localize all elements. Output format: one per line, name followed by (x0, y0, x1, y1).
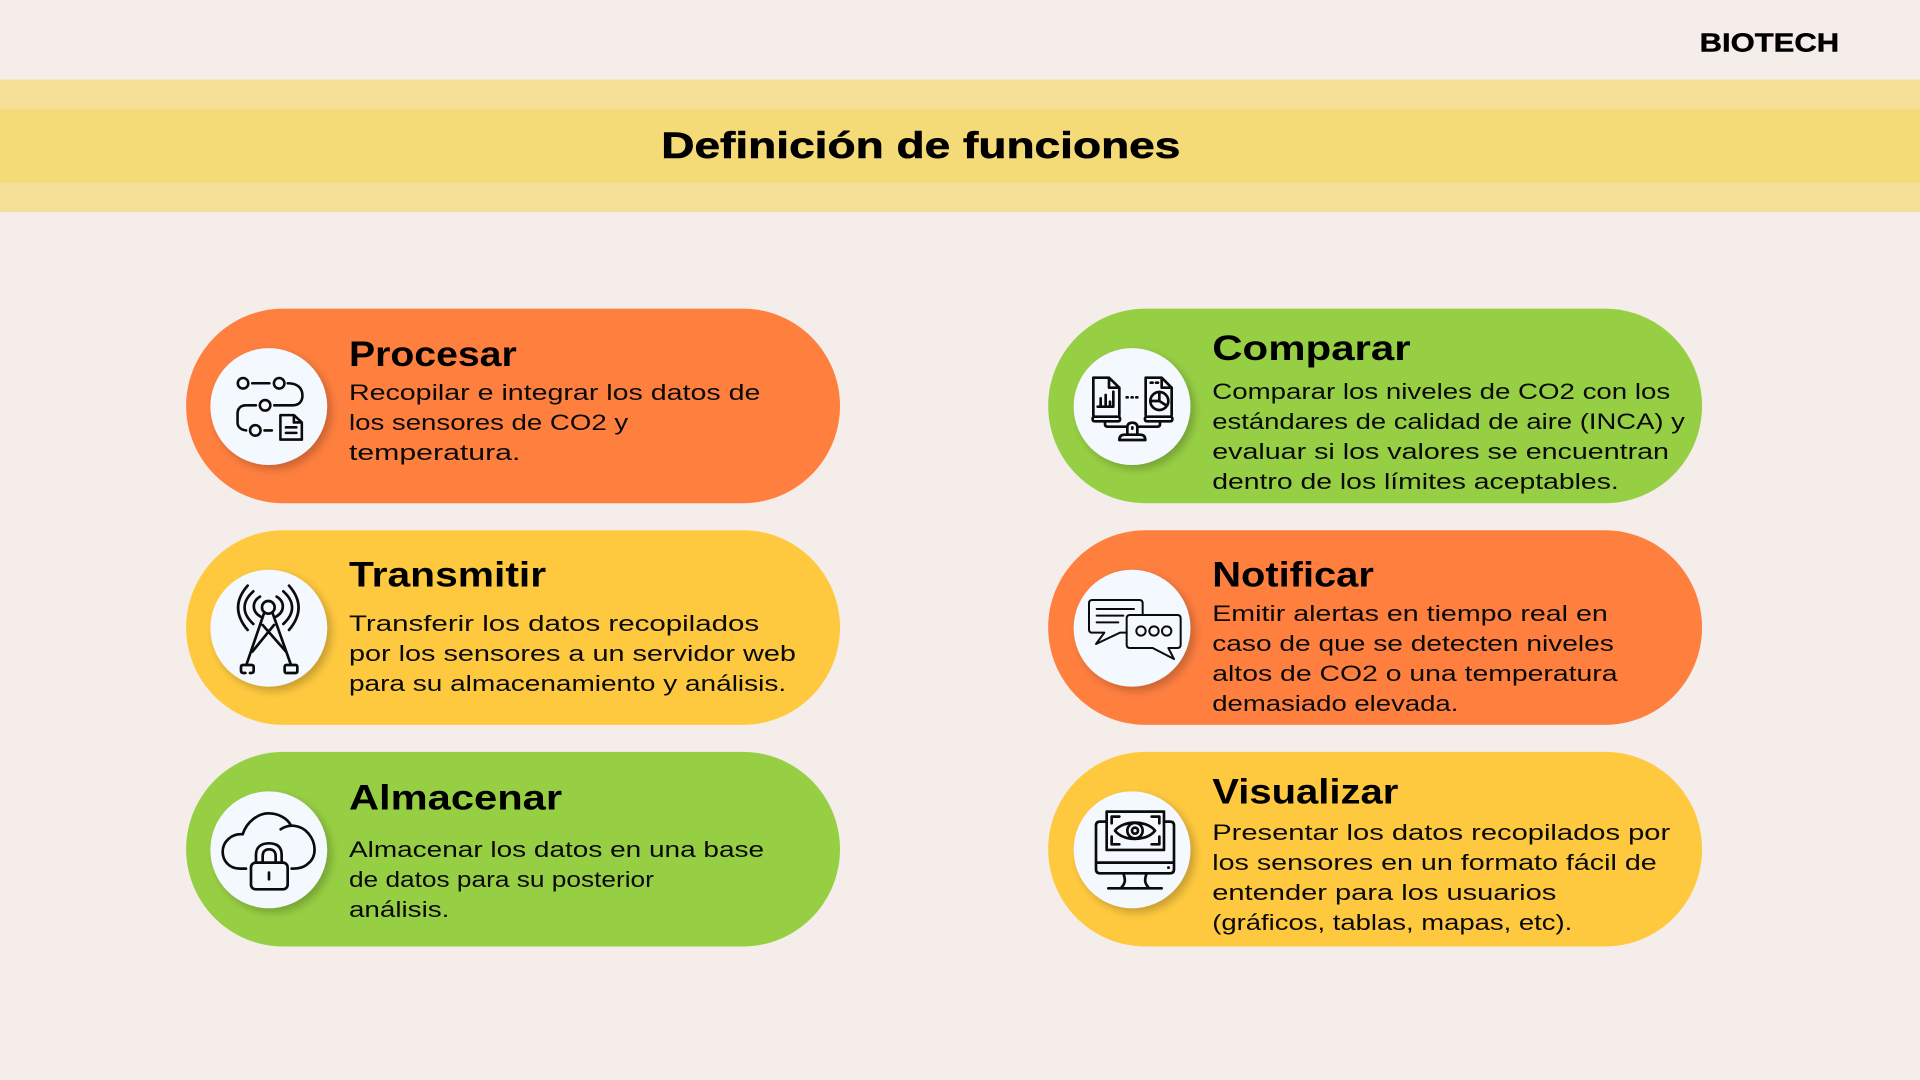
description (1212, 601, 1619, 716)
description: altos de CO2 o una temperatura (1212, 661, 1619, 686)
description: (gráficos, tablas, mapas, etc). (1212, 910, 1572, 935)
description (1212, 379, 1685, 494)
description: Presentar los datos recopilados por (1212, 820, 1670, 845)
description: Emitir alertas en tiempo real en (1212, 601, 1608, 626)
icon: chat bubbles (1089, 600, 1181, 659)
icon: monitor with eye (1096, 812, 1174, 888)
heading: Visualizar (1212, 772, 1399, 811)
icon: process flow with document (238, 378, 302, 440)
description: estándares de calidad de aire (INCA) y (1212, 409, 1685, 434)
description: de datos para su posterior (349, 867, 654, 892)
description: por los sensores a un servidor web (349, 641, 796, 666)
description: temperatura. (349, 440, 520, 465)
icon: antenna tower (238, 586, 298, 673)
panel: Notificar (1048, 530, 1702, 725)
description: evaluar si los valores se encuentran (1212, 439, 1669, 464)
description: los sensores en un formato fácil de (1212, 850, 1657, 875)
title: Definición de funciones (661, 125, 1180, 166)
description: caso de que se detecten niveles (1212, 631, 1614, 656)
heading: Comparar (1212, 329, 1411, 368)
panel: Procesar (186, 309, 840, 503)
panel: Comparar (1048, 309, 1702, 503)
description: los sensores de CO2 y (349, 410, 628, 435)
icon: documents on a balance (1093, 378, 1172, 440)
description (1212, 820, 1670, 935)
panel: Almacenar (186, 752, 840, 947)
brand name: BIOTECH (1700, 30, 1839, 58)
heading: Transmitir (349, 556, 547, 595)
description: Transferir los datos recopilados (349, 611, 759, 636)
description (349, 611, 796, 696)
title banner (0, 80, 1920, 212)
description: Almacenar los datos en una base (349, 837, 764, 862)
description: dentro de los límites aceptables. (1212, 469, 1619, 494)
description: entender para los usuarios (1212, 880, 1556, 905)
description: análisis. (349, 897, 449, 922)
icon: cloud with padlock (223, 813, 315, 889)
panel: Visualizar (1048, 752, 1702, 947)
heading: Notificar (1212, 556, 1374, 595)
heading: Almacenar (349, 778, 563, 817)
description: Comparar los niveles de CO2 con los (1212, 379, 1670, 404)
description (349, 837, 764, 922)
heading: Procesar (349, 335, 517, 374)
panel: Transmitir (186, 530, 840, 725)
description: demasiado elevada. (1212, 691, 1458, 716)
description: Recopilar e integrar los datos de (349, 380, 760, 405)
description: para su almacenamiento y análisis. (349, 671, 786, 696)
description (349, 380, 760, 465)
